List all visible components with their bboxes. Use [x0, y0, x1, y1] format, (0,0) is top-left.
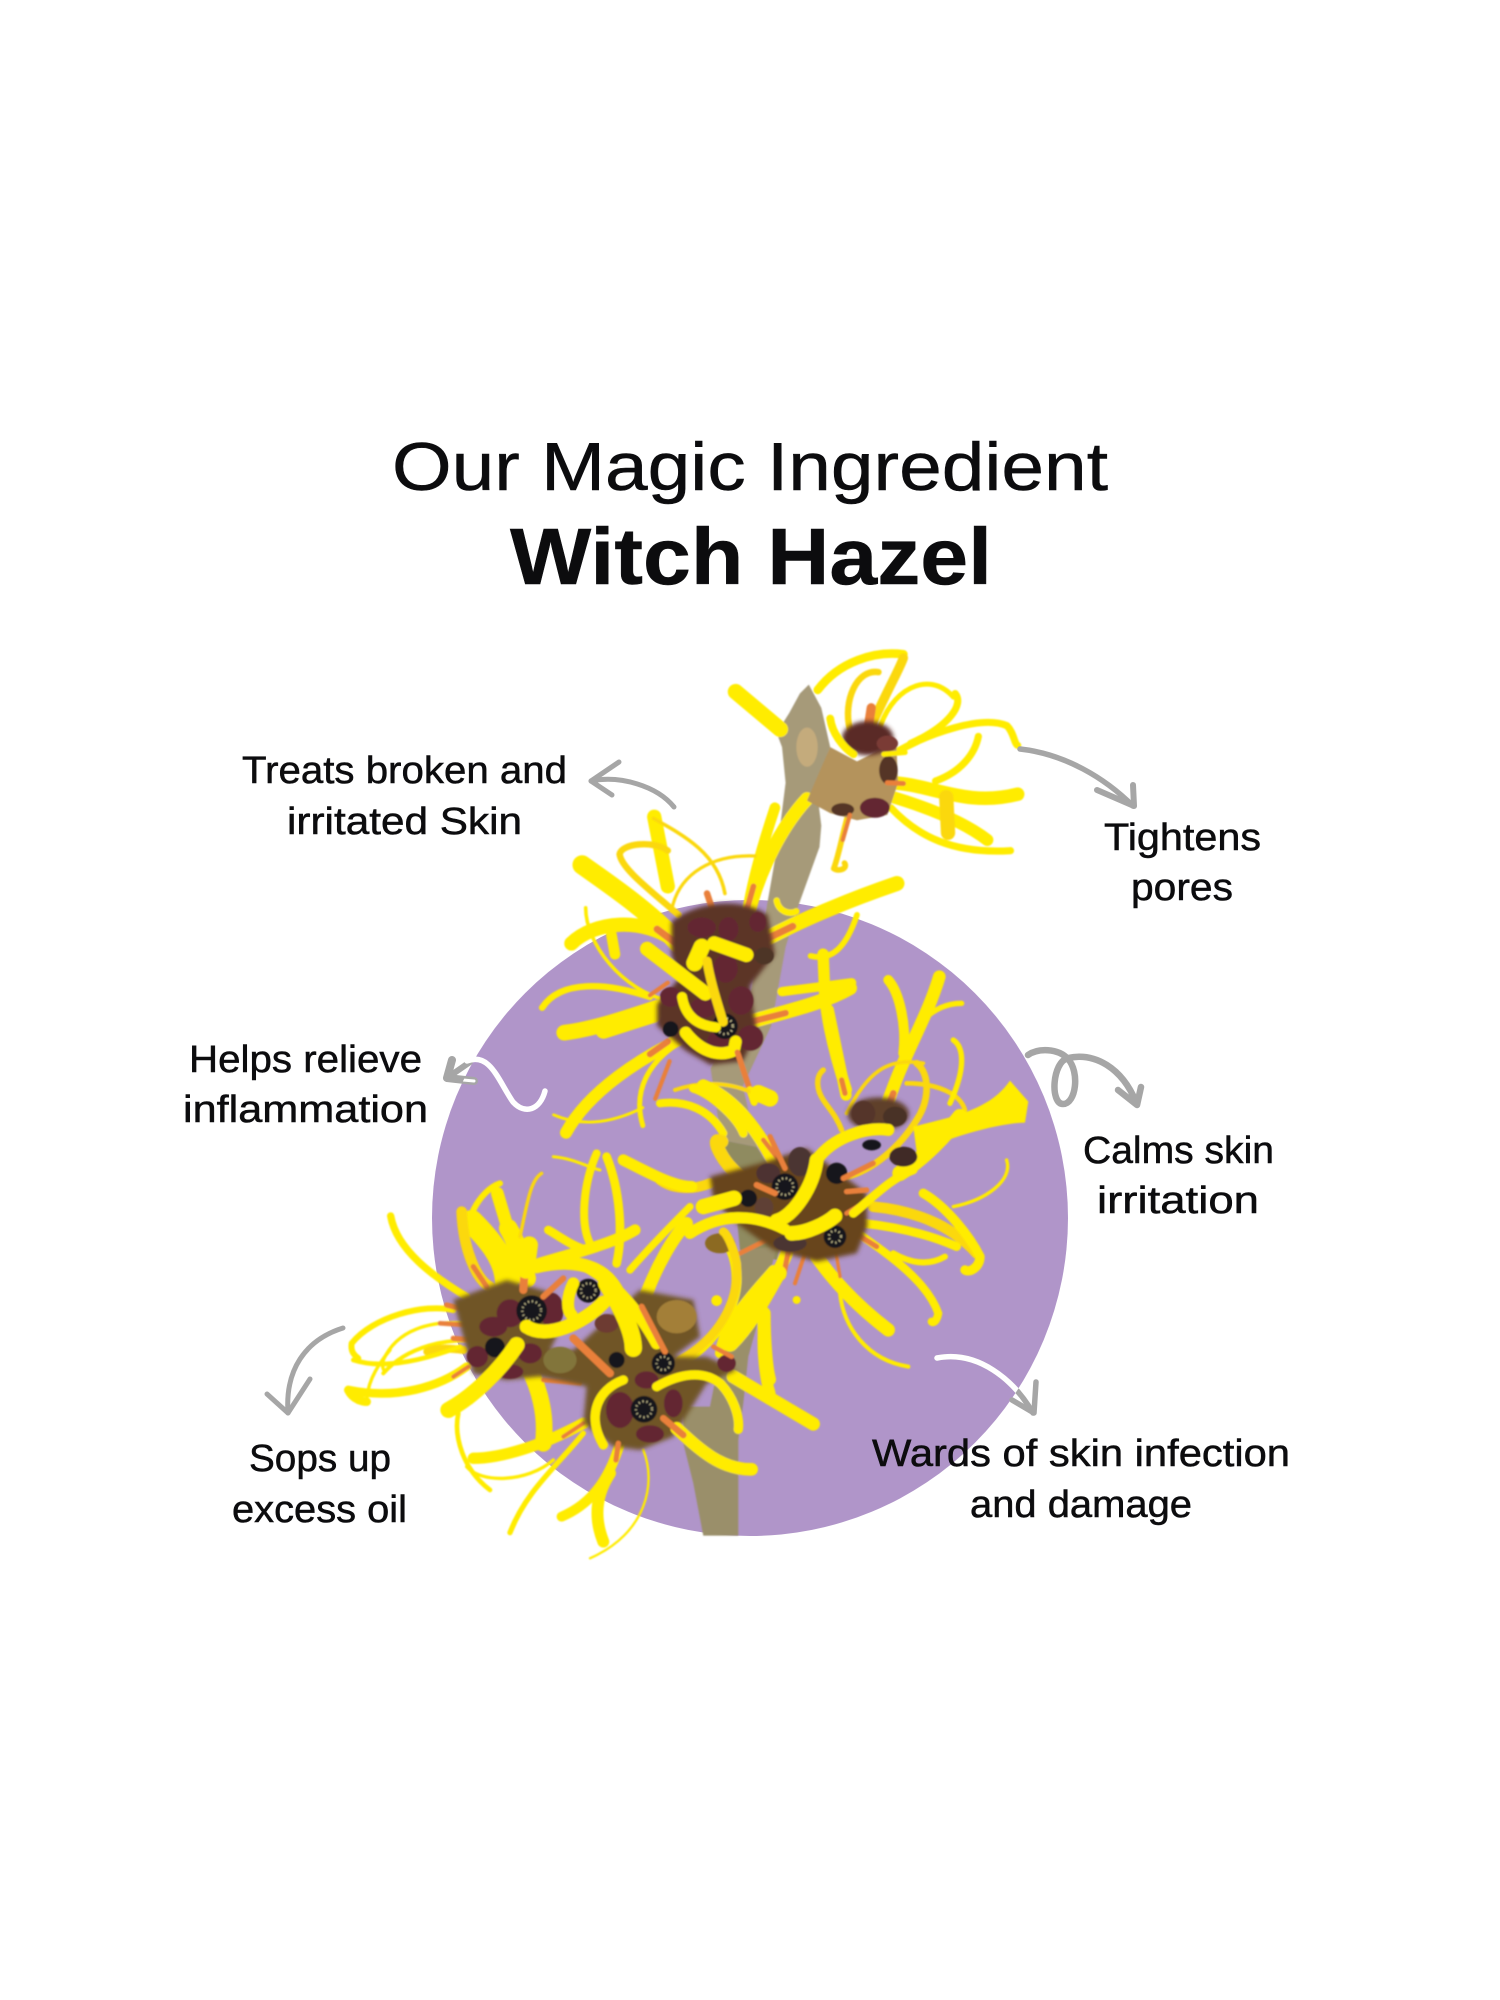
lower left flower body [453, 1280, 737, 1450]
middle flower back petals [654, 817, 668, 886]
label: Treats broken and irritated Skin: Treats broken and [242, 750, 567, 792]
label: Treats broken and irritated Skin: irritated Skin [287, 801, 522, 843]
purple background circle [432, 900, 1068, 1536]
label: Calms skin irritation: Calms skin [1083, 1130, 1274, 1172]
label: Treats broken and irritated Skin [242, 750, 567, 843]
arrow to Tightens pores [1020, 749, 1134, 806]
branch stem [683, 685, 830, 1536]
arrow to Calms skin irritation [1028, 1050, 1141, 1105]
right flower cluster [660, 977, 1028, 1379]
right flower front petals [777, 1160, 817, 1221]
right flower body [848, 1097, 909, 1131]
label: Tightens pores: Tightens [1104, 817, 1261, 859]
label: Calms skin irritation: irritation [1097, 1180, 1259, 1222]
label: Tightens pores: pores [1131, 867, 1233, 909]
heading: Witch Hazel: Witch Hazel [510, 512, 992, 601]
label: Wards of skin infection and damage: and damage [970, 1484, 1192, 1526]
label: Helps relieve inflammation [183, 1039, 428, 1131]
label: Helps relieve inflammation: Helps relieve [189, 1039, 422, 1081]
title: Our Magic Ingredient: Our Magic Ingredient [392, 429, 1108, 505]
witch hazel plant illustration [348, 654, 1028, 1558]
label: Wards of skin infection and damage [872, 1433, 1290, 1526]
arrow to Treats broken and irritated Skin [591, 762, 674, 807]
upper flowers [542, 654, 1018, 1133]
label: Tightens pores [1104, 817, 1261, 909]
label: Calms skin irritation [1083, 1130, 1274, 1222]
lower left flower cluster [348, 1153, 813, 1558]
label: Sops up excess oil: excess oil [232, 1489, 407, 1531]
label: Sops up excess oil [232, 1438, 407, 1531]
arrow to Sops up excess oil [267, 1328, 343, 1413]
middle flower body [657, 903, 775, 1065]
label: Wards of skin infection and damage: Wards of skin infection [872, 1433, 1290, 1475]
arrow to Helps relieve inflammation [447, 1059, 545, 1109]
top flower body [807, 742, 898, 820]
middle flower front petals [647, 949, 705, 993]
label: Helps relieve inflammation: inflammation [183, 1089, 428, 1131]
arrow to Wards of skin infection and damage [937, 1357, 1036, 1413]
lower left flower front petals [523, 1267, 525, 1290]
label: Sops up excess oil: Sops up [249, 1438, 391, 1480]
